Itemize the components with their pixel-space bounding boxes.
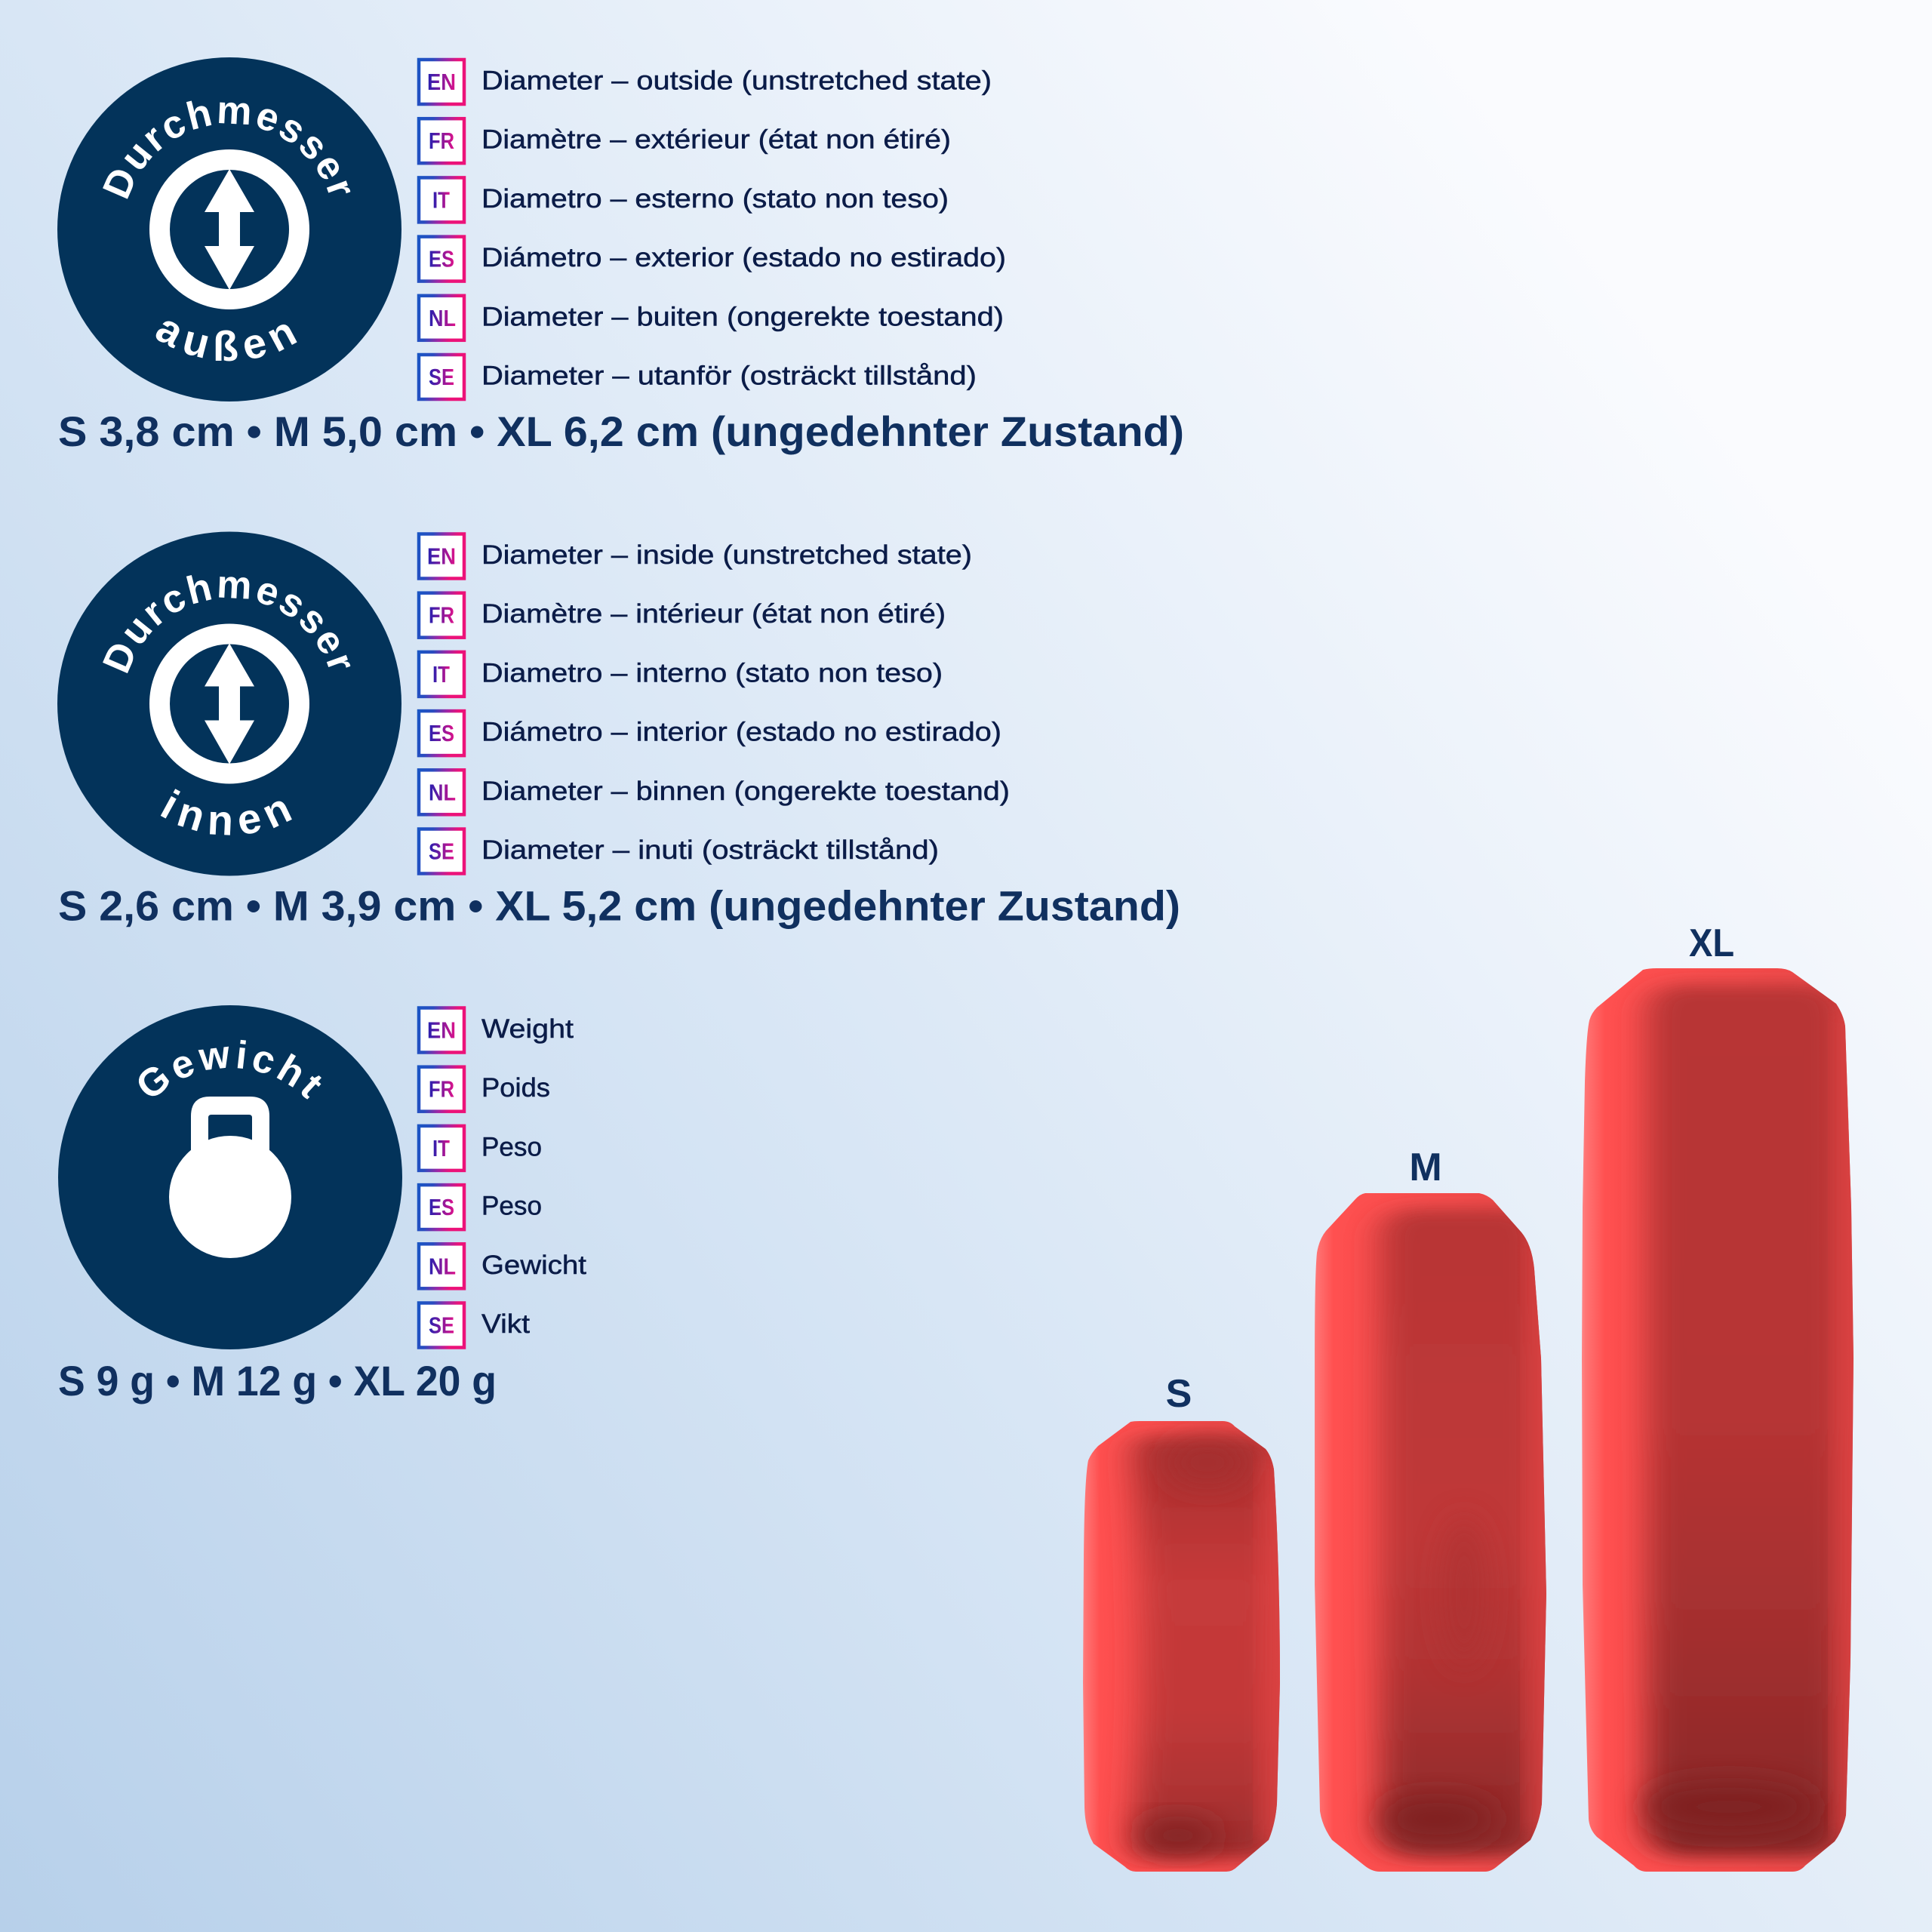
language list: weight: NL (429, 1253, 456, 1279)
icon: kettlebell badge: Gewicht (139, 1040, 321, 1100)
label: S: S (1166, 1372, 1192, 1416)
language list: weight: Weight (481, 1014, 574, 1044)
red ring S (1079, 1415, 1292, 1877)
language list: weight: Peso (481, 1192, 542, 1221)
language list: outside diameter: Diameter – utanför (osträckt tillstånd) (481, 361, 977, 391)
language list: outside diameter: Diámetro – exterior (estado no estirado) (481, 243, 1006, 272)
measurement: inside diameter: S 2,6 cm • M 3,9 cm • XL 5,2 cm (ungedehnter Zustand) (58, 881, 1180, 930)
icon: inside diameter badge: innen (160, 789, 292, 835)
language list: outside diameter: Diametro – esterno (stato non teso) (481, 184, 949, 214)
language list: outside diameter: NL (429, 305, 456, 331)
language list: inside diameter: Diamètre – intérieur (état non étiré) (481, 599, 946, 629)
language list: inside diameter: IT (432, 661, 450, 688)
language list: outside diameter: IT (432, 186, 450, 213)
red ring M (1309, 1189, 1559, 1877)
red ring XL (1577, 962, 1867, 1877)
icon: outside diameter badge: Durchmesser (103, 101, 350, 199)
language list: outside diameter: FR (429, 128, 454, 154)
language list: weight: ES (429, 1194, 454, 1220)
language list: outside diameter: SE (429, 364, 454, 390)
language list: weight: SE (429, 1312, 454, 1339)
language list: weight (419, 1008, 586, 1348)
language list: inside diameter: NL (429, 779, 456, 805)
measurement: weight: S 9 g • M 12 g • XL 20 g (58, 1357, 497, 1404)
icon: outside diameter badge: außen (155, 321, 297, 361)
language list: weight: Gewicht (481, 1251, 586, 1280)
icon: inside diameter badge (57, 531, 401, 875)
language list: outside diameter: ES (429, 246, 454, 272)
measurement: outside diameter: S 3,8 cm • M 5,0 cm • XL 6,2 cm (ungedehnter Zustand) (58, 408, 1184, 455)
language list: inside diameter: Diametro – interno (stato non teso) (481, 658, 943, 688)
icon: outside diameter badge (57, 57, 401, 401)
product: ring size XL (1577, 921, 1867, 1877)
language list: outside diameter: Diameter – buiten (ongerekte toestand) (481, 302, 1004, 331)
product: ring size M (1309, 1146, 1559, 1877)
language list: weight: Poids (481, 1073, 550, 1103)
language list: outside diameter: Diameter – outside (unstretched state) (481, 66, 992, 95)
language list: inside diameter: SE (429, 838, 454, 865)
language list: weight: Vikt (481, 1309, 530, 1339)
language list: weight: EN (427, 1017, 456, 1043)
language list: inside diameter (419, 534, 1010, 874)
icon: inside diameter badge: Durchmesser (103, 575, 350, 673)
label: M: M (1409, 1146, 1442, 1189)
language list: outside diameter: EN (427, 69, 456, 95)
language list: weight: IT (432, 1135, 450, 1161)
language list: weight: Peso (481, 1132, 542, 1161)
product: ring size S (1079, 1372, 1292, 1877)
panel: weight (58, 1005, 586, 1404)
language list: weight: FR (429, 1076, 454, 1103)
language list: outside diameter (419, 60, 1006, 399)
language list: inside diameter: Diameter – inside (unstretched state) (481, 540, 972, 570)
language list: inside diameter: Diameter – binnen (ongerekte toestand) (481, 777, 1010, 806)
language list: inside diameter: EN (427, 543, 456, 569)
panel: inside diameter (57, 531, 1180, 930)
language list: inside diameter: Diámetro – interior (estado no estirado) (481, 718, 1001, 747)
language list: inside diameter: Diameter – inuti (osträckt tillstånd) (481, 835, 939, 865)
label: XL: XL (1689, 921, 1734, 965)
icon: kettlebell badge (58, 1005, 402, 1349)
language list: inside diameter: ES (429, 720, 454, 746)
language list: outside diameter: Diamètre – extérieur (état non étiré) (481, 125, 951, 155)
panel: outside diameter (57, 57, 1184, 455)
language list: inside diameter: FR (429, 602, 454, 629)
